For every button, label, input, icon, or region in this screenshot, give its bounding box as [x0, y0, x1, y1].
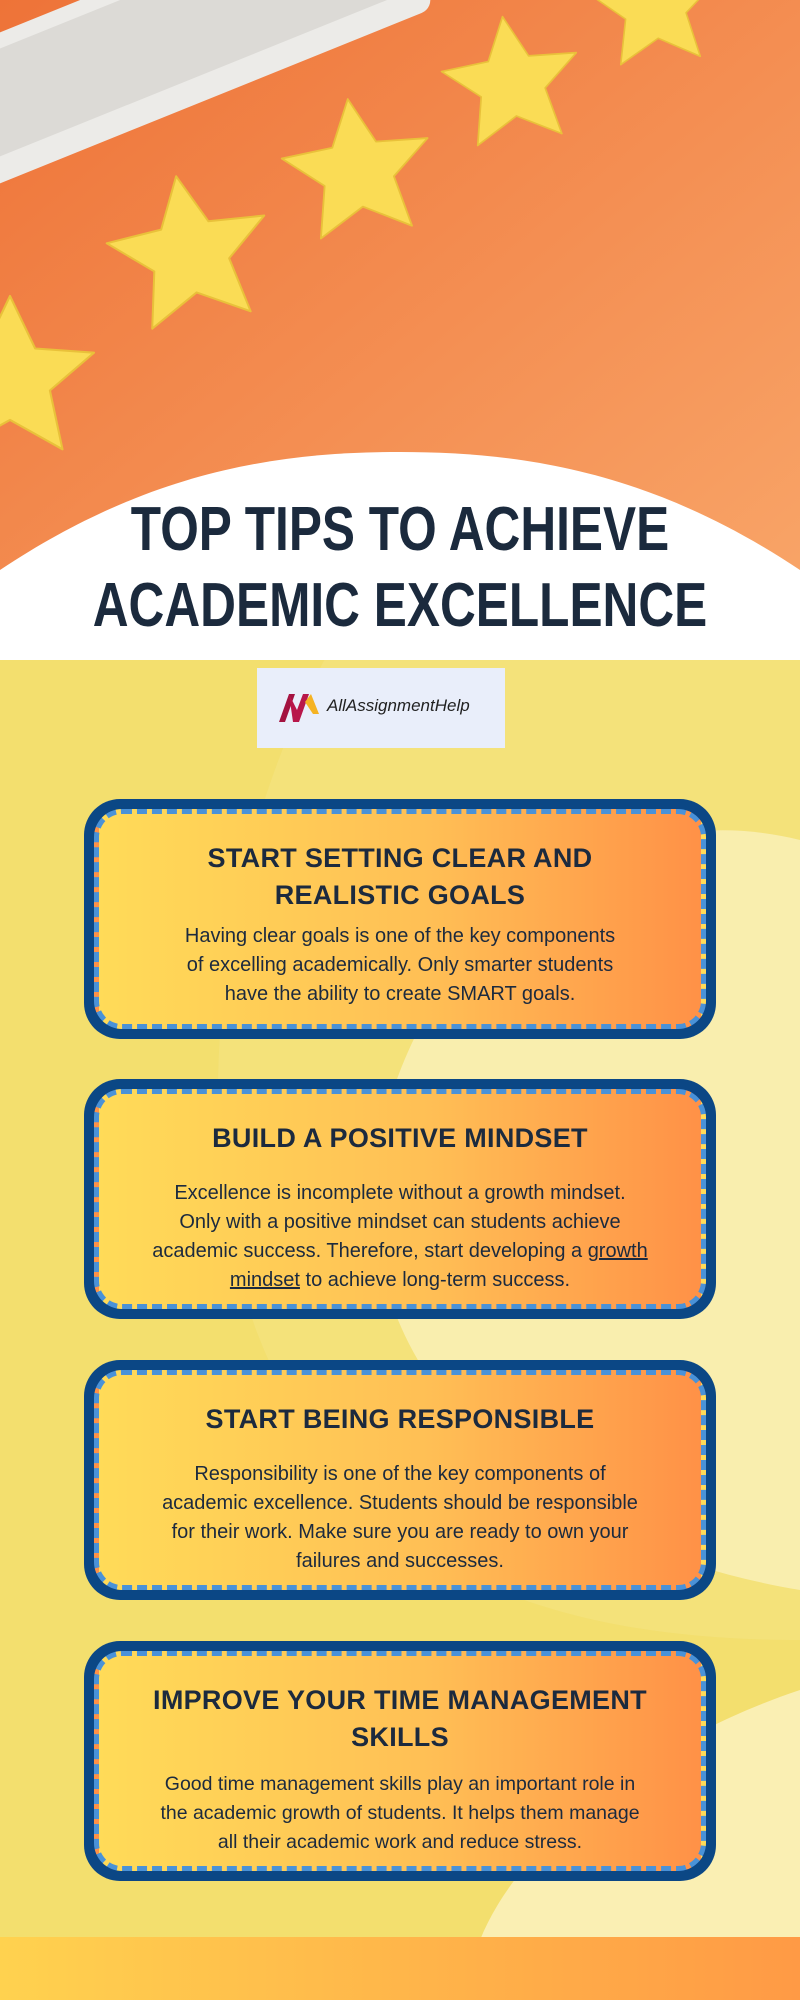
logo [257, 668, 505, 748]
card 2: mindset to achieve long-term success. [230, 1269, 570, 1291]
card 2: Only with a positive mindset can students achieve [179, 1211, 621, 1233]
card 1: Having clear goals is one of the key components [185, 925, 615, 947]
bottom band [0, 1937, 800, 2000]
title [93, 495, 707, 640]
card 1: START SETTING CLEAR AND [208, 843, 592, 873]
card 2: BUILD A POSITIVE MINDSET [212, 1123, 588, 1153]
title: TOP TIPS TO ACHIEVE [131, 495, 669, 564]
card 3: START BEING RESPONSIBLE [206, 1404, 594, 1434]
white arch [0, 452, 800, 660]
card 2 [84, 1079, 716, 1319]
card 1: have the ability to create SMART goals. [225, 983, 575, 1005]
card 2: Excellence is incomplete without a growth mindset. [174, 1182, 626, 1204]
card 3: for their work. Make sure you are ready to own your [172, 1521, 628, 1543]
card 2: academic success. Therefore, start developing a growth [152, 1240, 648, 1262]
card 1: of excelling academically. Only smarter students [187, 954, 613, 976]
card 4: all their academic work and reduce stress. [218, 1831, 582, 1853]
card 4: the academic growth of students. It helps them manage [160, 1802, 640, 1824]
card 3 [84, 1360, 716, 1600]
card 3: failures and successes. [296, 1550, 504, 1572]
stars [0, 0, 724, 449]
card 4: SKILLS [351, 1722, 449, 1752]
header photo [0, 0, 800, 660]
logo: AllAssignmentHelp [327, 696, 470, 715]
card 4 [84, 1641, 716, 1881]
title: ACADEMIC EXCELLENCE [93, 571, 707, 640]
background swirl [0, 660, 800, 1937]
card 3: academic excellence. Students should be responsible [162, 1492, 638, 1514]
card 1 [84, 799, 716, 1039]
card 3: Responsibility is one of the key components of [194, 1463, 606, 1485]
card 1: REALISTIC GOALS [275, 880, 525, 910]
card 4: Good time management skills play an important role in [165, 1773, 635, 1795]
card 4: IMPROVE YOUR TIME MANAGEMENT [153, 1685, 647, 1715]
keyboard [0, 0, 435, 203]
